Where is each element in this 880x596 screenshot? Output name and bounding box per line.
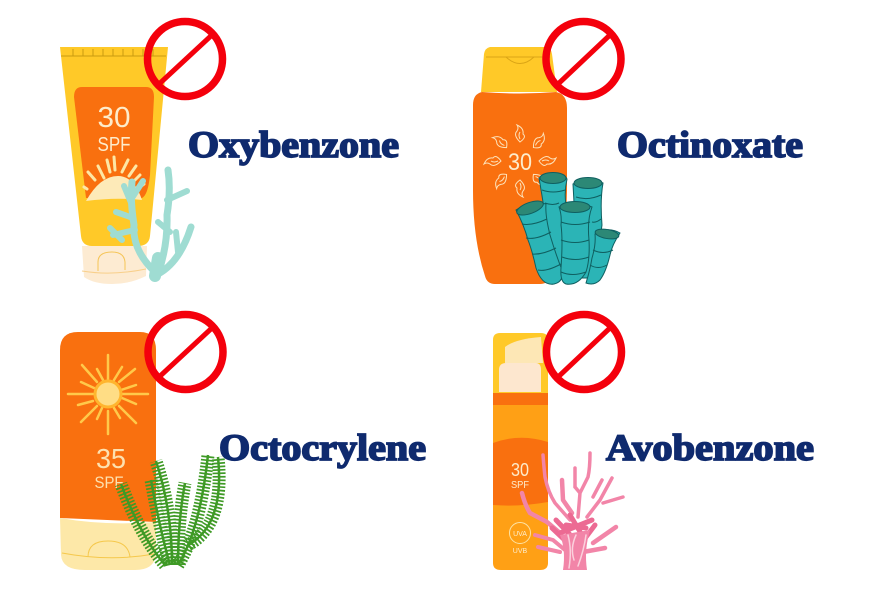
icon: sun: [68, 355, 148, 434]
icon: UVA badge: [510, 522, 530, 544]
label: UVB: UVB: [513, 548, 528, 555]
heading: Octocrylene: Octocrylene: [219, 428, 426, 469]
icon: yellow sunscreen tube: [60, 47, 168, 284]
icon: prohibition sign: [148, 314, 223, 390]
label: 30: 30: [508, 149, 532, 176]
icon: orange sunscreen bottle: [473, 47, 567, 284]
icon: prohibition sign: [148, 22, 222, 96]
panel: octocrylene: [60, 314, 426, 570]
icon: green seaweed: [121, 455, 219, 565]
heading: Avobenzone: Avobenzone: [606, 428, 814, 469]
label: 30 SPF: 30: [511, 460, 529, 480]
heading: Oxybenzone: Oxybenzone: [188, 125, 399, 166]
label: 30 SPF: 30: [98, 102, 130, 134]
label: UVA: UVA: [513, 531, 527, 538]
icon: orange spray bottle: [493, 333, 548, 570]
icon: orange sunscreen stick: SPF: [94, 473, 124, 492]
panel: octinoxate: [473, 22, 803, 284]
icon: sun outline: [484, 125, 556, 197]
panel: avobenzone: [493, 314, 814, 570]
heading: Octinoxate: Octinoxate: [617, 125, 803, 166]
icon: prohibition sign: [546, 314, 622, 390]
icon: orange sunscreen stick: [60, 332, 156, 570]
icon: orange spray bottle: SPF: [511, 479, 529, 491]
icon: pink coral: [522, 453, 623, 570]
icon: yellow sunscreen tube: SPF: [98, 134, 130, 156]
icon: teal tube sponges: [515, 172, 620, 284]
label: 35 SPF: 35: [96, 443, 126, 474]
panel: oxybenzone: [60, 22, 399, 284]
icon: aqua coral: [110, 170, 191, 276]
icon: prohibition sign: [546, 22, 621, 96]
